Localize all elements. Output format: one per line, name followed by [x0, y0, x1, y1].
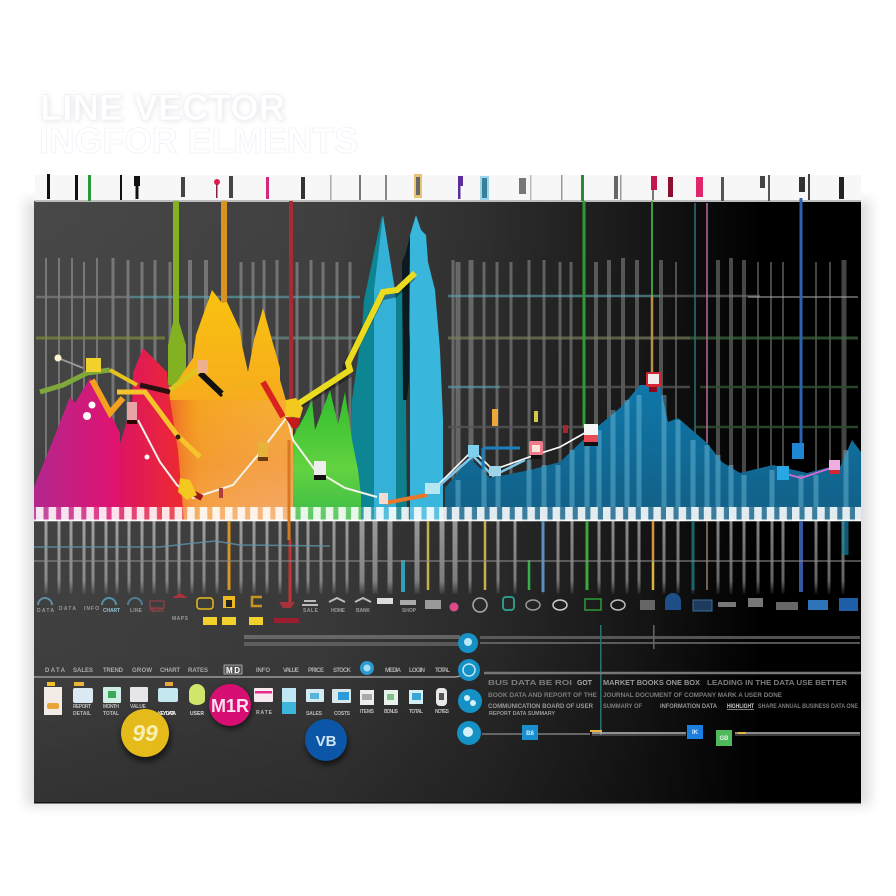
line series: orange zigzag: [92, 380, 200, 457]
white strip with ticks: [34, 507, 861, 521]
panel bottom edge: [34, 802, 861, 804]
label row above icon cards: GROW: [132, 668, 152, 674]
captions under icon cards: SALES: [306, 711, 323, 717]
label row above icon cards: MD: [226, 666, 240, 675]
icon row: left captions: NEWS: [150, 608, 165, 614]
line series: green top-left line: [40, 358, 137, 392]
captions under icon cards: MONTH: [103, 704, 119, 710]
circle badge: blue: VB: [316, 733, 337, 750]
title: INGFOR ELMENTS: [39, 120, 358, 161]
area chart: green stem peak: [168, 201, 186, 385]
timeline box: blue left: [522, 725, 538, 740]
label row above icon cards: INFO: [256, 668, 270, 674]
icon row: left captions: DATA: [37, 608, 54, 614]
coloured vertical drop lines: [176, 198, 801, 445]
coloured horizontal grid rows: [36, 296, 858, 427]
text block: right paragraph: BOOK DATA AND REPORT OF THE: [488, 692, 598, 699]
timeline box: green: [716, 730, 732, 746]
section divider lines: [34, 673, 861, 677]
orange segment: [385, 495, 427, 503]
panel shadow: [26, 200, 870, 806]
icon row: left captions: SHOP: [402, 608, 417, 614]
captions under icon cards: TOTAL: [409, 709, 423, 715]
captions under icon cards: BONUS: [384, 709, 399, 715]
text block: right paragraph: INFORMATION DATA: [660, 704, 718, 710]
circle badge: yellow: 99: [132, 720, 158, 746]
circle badge: magenta: M1R: [211, 696, 249, 716]
captions under icon cards: VALUE: [130, 704, 147, 710]
area chart: teal towers: [350, 215, 443, 520]
captions under icon cards: RATE: [256, 710, 273, 716]
label row above icon cards: TREND: [103, 668, 124, 674]
text block: right paragraph: LEADING IN THE DATA USE BETTER: [707, 680, 847, 687]
text block: right paragraph: SUMMARY OF: [603, 704, 642, 710]
area chart: green spikes: [293, 390, 361, 521]
label row above icon cards: CHART: [160, 668, 180, 674]
label row above icon cards: DATA: [45, 668, 66, 674]
area chart: gold peaks: [168, 290, 293, 521]
icon row: left captions: INFO: [84, 606, 99, 612]
icon row: right icons: [473, 593, 858, 612]
captions under icon cards: DETAIL: [73, 711, 91, 717]
lower coloured drop lines: [229, 440, 845, 602]
icon row: left captions: CHART: [103, 608, 120, 614]
text block: right paragraph: BUS DATA BE ROI: [488, 680, 572, 687]
circle badge: blue: [305, 719, 348, 765]
label row above icon cards: PRICE: [308, 668, 324, 674]
area chart: light bars over blue ridge: [458, 395, 846, 507]
timeline box: blue right: IK: [692, 730, 699, 736]
line series: white descending line: [138, 417, 377, 498]
area chart: orange overlay: [168, 400, 293, 521]
label row above icon cards: LOGIN: [409, 668, 425, 674]
label row above icon cards: SALES: [73, 668, 93, 674]
label row above icon cards: [45, 665, 450, 675]
captions under icon cards: COSTS: [334, 711, 351, 717]
timeline box: blue left: B8: [526, 731, 534, 737]
panel: dark chart board: [34, 201, 861, 803]
captions under icon cards: TOTAL: [103, 711, 119, 717]
captions under icon cards: [73, 704, 450, 717]
line series: blue right line: [425, 430, 834, 492]
text block: right paragraph: REPORT DATA SUMMARY: [489, 711, 555, 717]
area chart: magenta peak: [34, 378, 120, 521]
chart markers: [54, 354, 840, 504]
captions under icon cards: USER: [190, 711, 204, 717]
captions under icon cards: REPORT: [73, 704, 91, 710]
icon cards row: [44, 682, 447, 715]
area chart: red peak: [118, 348, 184, 521]
grey vertical bars upper grid: [46, 258, 844, 507]
area chart: blue ridge: [445, 385, 861, 521]
lower horizontal rows: [34, 541, 861, 561]
text block: right paragraph: [488, 680, 858, 717]
icon row: left captions: BANK: [356, 608, 370, 614]
timeline line: [482, 731, 860, 735]
small blue dot on label row: [360, 661, 374, 675]
text block: right paragraph: SHARE ANNUAL BUSINESS DATA ONE: [758, 704, 858, 710]
title: LINE VECTOR: [40, 87, 285, 128]
top white tab strip: [35, 174, 861, 202]
label row above icon cards: TOTAL: [435, 668, 450, 674]
icon row: left captions: MAPS: [172, 616, 189, 622]
text block: right paragraph: GOT: [577, 680, 593, 687]
captions under icon cards: NOTES: [435, 709, 450, 715]
text block: right paragraph: HIGHLIGHT: [727, 704, 754, 710]
icon row: left captions: LINE: [130, 608, 143, 614]
text block: right paragraph: MARKET BOOKS ONE BOX: [603, 680, 700, 687]
circle badge: magenta: [209, 684, 252, 729]
captions under icon cards: ITEMS: [360, 709, 375, 715]
line series: main yellow line: [296, 273, 415, 407]
text block: right paragraph: COMMUNICATION BOARD OF USER: [488, 704, 594, 710]
bar lines below icon row: [244, 625, 860, 735]
timeline box: green: GB: [720, 736, 729, 742]
icon row: left captions: SALE: [303, 608, 319, 614]
circle badge: yellow: [121, 709, 171, 762]
title: [39, 87, 358, 161]
timeline box: blue right: [687, 725, 703, 739]
label row above icon cards: MEDIA: [385, 668, 402, 674]
label row above icon cards: STOCK: [333, 668, 352, 674]
label row above icon cards: VALUE: [283, 668, 299, 674]
icon row: left captions: DATA: [59, 606, 76, 612]
text block: right paragraph: JOURNAL DOCUMENT OF COMPANY MARK A USER DONE: [603, 692, 783, 699]
icon row: left icons: [38, 593, 458, 625]
line series: black, yellow and red segments: [140, 370, 283, 498]
lower grey bars: [46, 521, 843, 594]
label row above icon cards: RATES: [188, 668, 208, 674]
icon row: left captions: HOME: [331, 608, 346, 614]
icon row: left captions: [37, 606, 417, 622]
title: LINE VECTOR: [41, 88, 286, 129]
step icons: teal circles: [457, 633, 482, 745]
captions under icon cards: KEY DATA: [158, 711, 176, 717]
